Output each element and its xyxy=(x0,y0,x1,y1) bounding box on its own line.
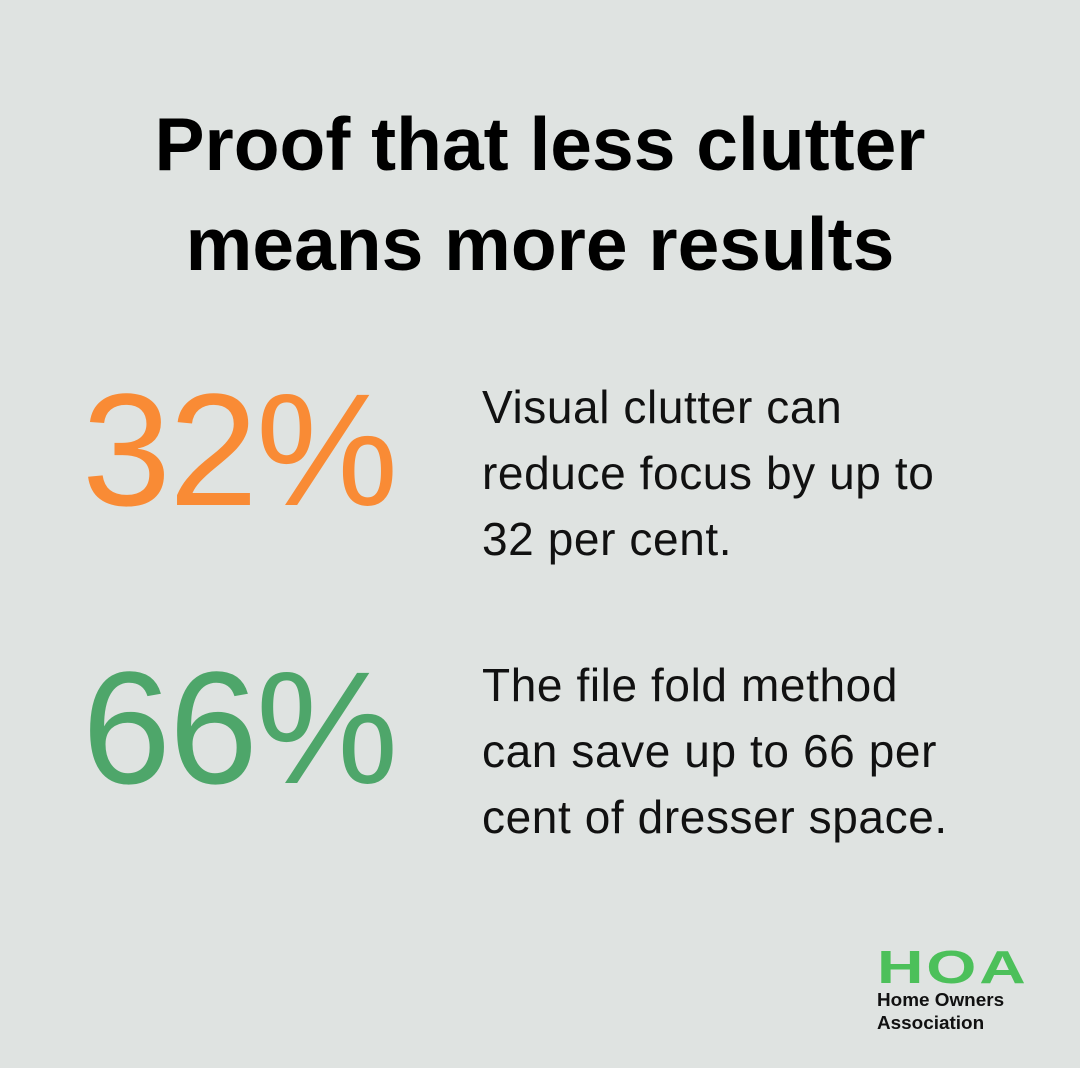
title: Proof that less clutter xyxy=(154,102,925,186)
text: 32% description: 32 per cent. xyxy=(482,513,732,565)
logo: HOA: HOA xyxy=(877,941,1029,993)
logo: HOA xyxy=(877,941,1029,1033)
text: 66% description xyxy=(482,659,948,843)
text: 66% description: cent of dresser space. xyxy=(482,791,948,843)
title xyxy=(154,102,925,286)
text: 32% description: Visual clutter can xyxy=(482,381,842,433)
text: 32% description: reduce focus by up to xyxy=(482,447,934,499)
text: 66% description: The file fold method xyxy=(482,659,898,711)
stat: 32%: 32% xyxy=(82,360,396,539)
title: means more results xyxy=(186,202,894,286)
logo: HOA: Home Owners xyxy=(877,990,1004,1010)
stat: 66%: 66% xyxy=(82,638,396,817)
text: 66% description: can save up to 66 per xyxy=(482,725,937,777)
logo: HOA: Association xyxy=(877,1013,984,1033)
text: 32% description xyxy=(482,381,934,565)
